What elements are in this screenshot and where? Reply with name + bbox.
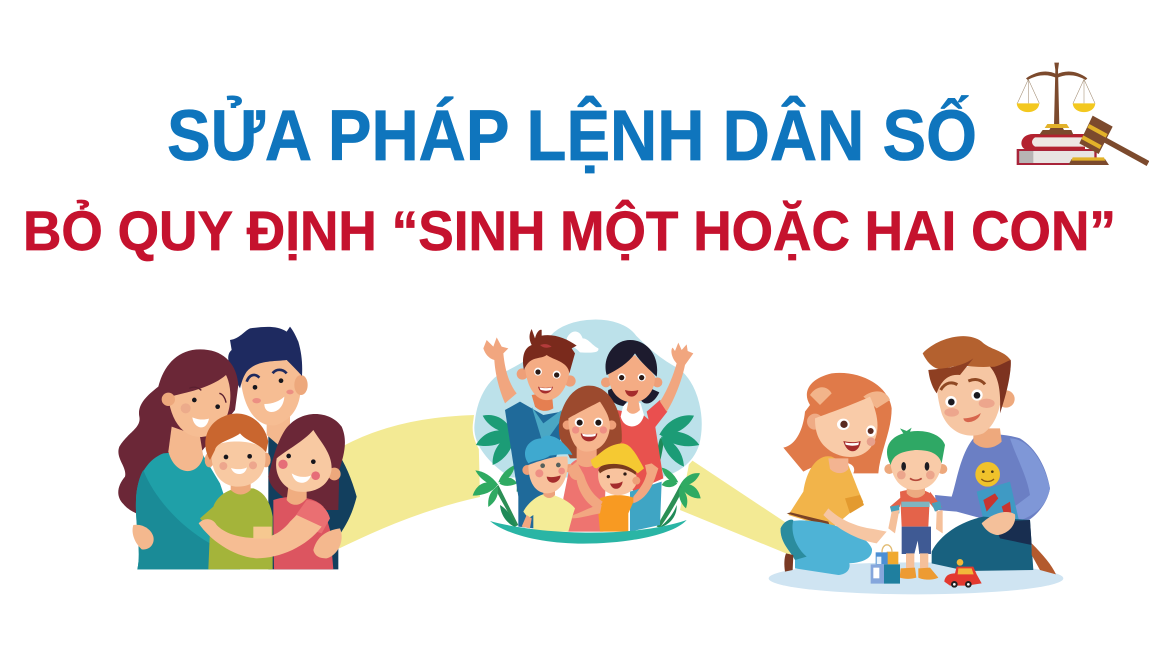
yellow connector: left to centre: [338, 415, 480, 549]
mother: [781, 373, 892, 575]
blue trousers: [630, 482, 662, 532]
title: SỬA PHÁP LỆNH DÂN SỐ: [167, 96, 977, 176]
middle girl: [559, 386, 622, 532]
yellow connector: centre to right: [680, 459, 800, 555]
father: [228, 327, 357, 569]
ground swoosh: [490, 520, 687, 544]
child: [884, 428, 947, 580]
boy with yellow hat: [568, 443, 658, 532]
father: [483, 329, 577, 528]
boy with blue hair: [522, 436, 575, 532]
hugging arm and hands: [199, 515, 342, 558]
icon: scales of justice, books and gavel: [1017, 63, 1149, 166]
illustration: family of five with palm trees: [473, 319, 702, 544]
toy car: [944, 559, 982, 588]
father: [923, 336, 1056, 574]
subtitle: BỎ QUY ĐỊNH “SINH MỘT HOẶC HAI CON”: [23, 199, 1116, 262]
palm trees: [473, 415, 701, 528]
boy: [200, 414, 273, 569]
illustration: parents playing with child: [769, 336, 1063, 594]
floor: [769, 562, 1063, 594]
sky background: [473, 319, 702, 478]
girl: [268, 414, 345, 569]
cloud: [567, 331, 598, 353]
toy blocks: [871, 545, 900, 584]
mother: [118, 349, 240, 569]
illustration: family hugging: [118, 327, 357, 569]
mother with black hair: [601, 340, 693, 492]
